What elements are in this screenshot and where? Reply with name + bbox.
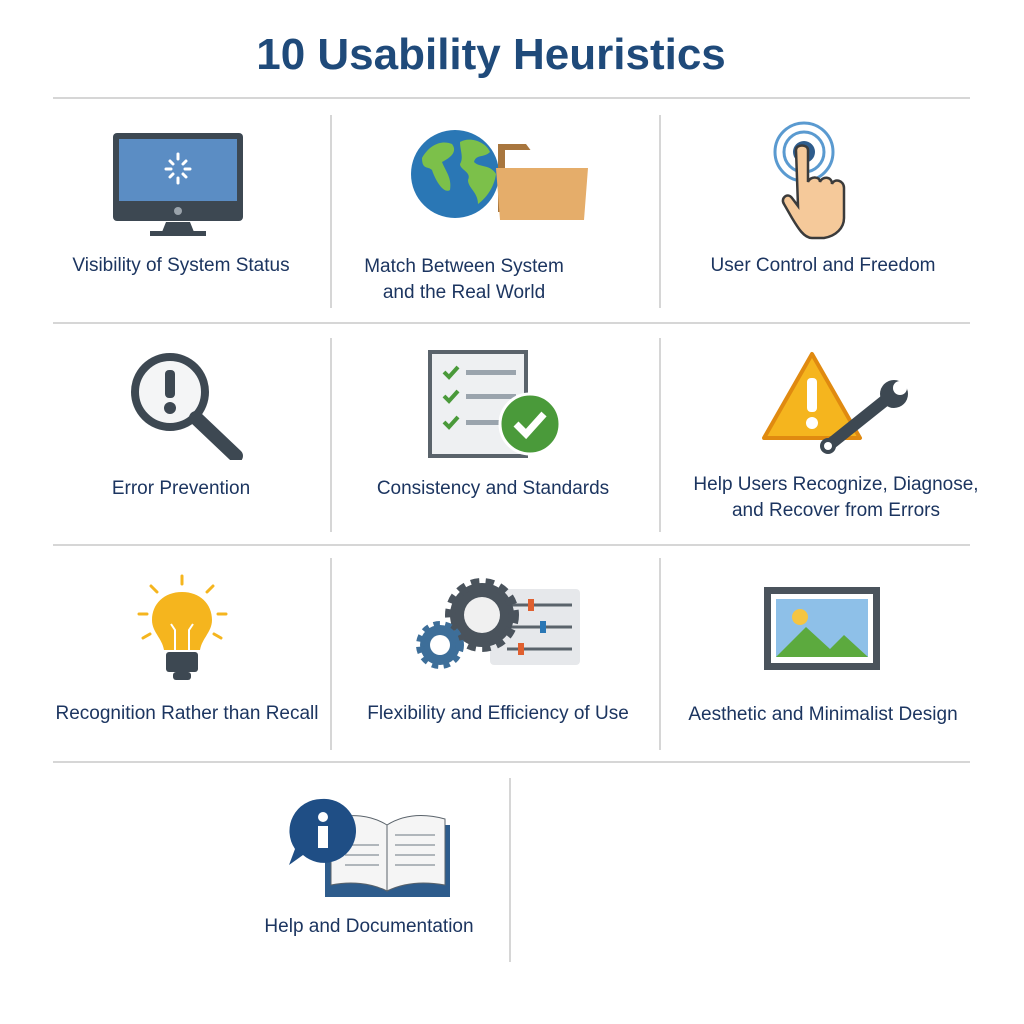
label: help users [693, 474, 979, 521]
label: visibility: Visibility of System Status [72, 255, 290, 276]
label: error prevention: Error Prevention [112, 478, 250, 499]
label: aesthetic: Aesthetic and Minimalist Design [688, 704, 958, 725]
label: match: and the Real World [383, 282, 545, 303]
icon: monitor [113, 133, 243, 236]
icon: light bulb [138, 574, 228, 680]
icon: info book [289, 798, 450, 897]
icon: checklist [428, 350, 558, 458]
icon: hand touch [774, 122, 846, 240]
icon: warning and wrench [762, 352, 908, 454]
label: help users: Help Users Recognize, Diagnose, [693, 474, 979, 495]
label: match [364, 256, 564, 303]
label: help users: and Recover from Errors [732, 500, 940, 521]
label: help docs: Help and Documentation [264, 916, 474, 937]
icon: globe and folder [411, 130, 588, 220]
label: flexibility: Flexibility and Efficiency of Use [367, 703, 629, 724]
label: recognition: Recognition Rather than Recall [56, 703, 318, 724]
label: consistency: Consistency and Standards [377, 478, 609, 499]
title: 10 Usability Heuristics [256, 30, 726, 79]
label: user control: User Control and Freedom [711, 255, 935, 276]
label: match: Match Between System [364, 256, 564, 277]
icon: magnifier [131, 353, 243, 460]
icon: picture frame [764, 587, 880, 670]
icon: gears and sliders [416, 578, 580, 669]
